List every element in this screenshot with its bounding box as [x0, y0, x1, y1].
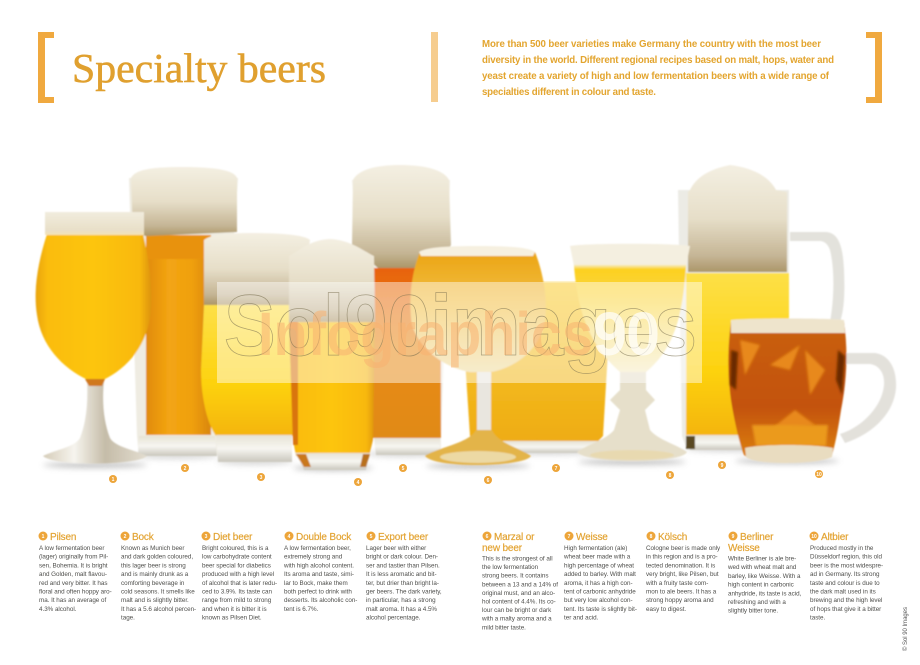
- column 2: Bock: [120, 532, 196, 622]
- watermark outline text: Sol90images: [224, 278, 697, 374]
- column 7: Weisse: aroma, it has a high con-: [564, 580, 633, 587]
- column 9: Berliner Weisse: Weisse: [728, 543, 760, 554]
- column 7: Weisse: wheat beer made with a: [563, 554, 631, 561]
- column 4: Double Bock: tent is 6.7%.: [284, 606, 319, 613]
- column 1: Pilsen: ma. It has an average of: [39, 597, 106, 604]
- column 10: Altbier: taste.: [810, 615, 826, 622]
- column 3: Diet beer: [202, 532, 277, 622]
- column 2: Bock: and is mainly drunk as a: [121, 571, 189, 578]
- glass number markers: [109, 461, 823, 486]
- column 9: Berliner Weisse: Berliner: [740, 532, 774, 543]
- column 8: Kolsch: tected denomination. It is: [646, 562, 715, 569]
- column 2: Bock: malt and is slightly bitter.: [121, 597, 189, 604]
- column 3: Diet beer: of alcohol that is later redu-: [202, 580, 277, 587]
- glass 7: weisse: [460, 282, 612, 455]
- column 7: Weisse: [563, 532, 637, 622]
- column 5: Export beer: bright or dark colour. Den-: [366, 554, 438, 561]
- glass number markers: 5: [402, 466, 405, 472]
- column 5: Export beer: Lager beer with either: [366, 545, 426, 552]
- column 1: Pilsen: [38, 532, 112, 613]
- column 3: Diet beer: Bright coloured, this is a: [202, 545, 269, 552]
- watermark panel: [217, 282, 702, 383]
- glass 8: kolsch: [570, 244, 690, 465]
- column 5: Export beer: in particular, has a strong: [366, 597, 436, 604]
- column 5: Export beer: Export beer: [378, 532, 429, 543]
- column 8: Kolsch: mon to ale beers. It has a: [646, 588, 717, 596]
- column 10: Altbier: ad in Germany. Its strong: [810, 571, 880, 578]
- column 7: Weisse: but very low alcohol con-: [564, 597, 633, 604]
- column 7: Weisse: High fermentation (ale): [564, 545, 627, 552]
- column 6: Marzal or new beer: hol content of 4.4%. Its co-: [482, 598, 556, 606]
- column 7: Weisse: tent of carbonic anhydride: [564, 588, 636, 596]
- glass number markers: 4: [357, 480, 360, 486]
- column 6: Marzal or new beer: 6: [486, 534, 489, 540]
- column 8: Kolsch: Kölsch: [658, 532, 687, 543]
- column 5: Export beer: ser and tastier than Pilsen.: [366, 562, 440, 569]
- column 10: Altbier: of hops that give it a bitter: [810, 606, 881, 613]
- column 9: Berliner Weisse: refreshing and with a: [728, 599, 786, 606]
- column 9: Berliner Weisse: high content in carbonic: [728, 582, 794, 589]
- column 5: Export beer: 5: [370, 534, 373, 540]
- divider: [431, 32, 438, 102]
- column 1: Pilsen: 4.3% alcohol.: [39, 606, 77, 613]
- column 5: Export beer: [366, 532, 442, 622]
- column 6: Marzal or new beer: [481, 532, 558, 631]
- column 6: Marzal or new beer: between a 13 and a 14% of: [482, 581, 558, 588]
- column 1: Pilsen: sen, Bohemia. It is bright: [39, 562, 108, 569]
- column 3: Diet beer: and when it is bitter it is: [202, 606, 267, 613]
- glass number markers: 8: [669, 473, 672, 479]
- glass number markers: 7: [555, 466, 558, 472]
- column 8: Kolsch: strong hoppy aroma and: [646, 597, 714, 604]
- title: Specialty beers: [72, 45, 326, 91]
- column 3: Diet beer: 3: [205, 534, 208, 540]
- column 2: Bock: Known as Munich beer: [121, 545, 184, 552]
- column 4: Double Bock: lar to Bock, make them: [284, 580, 348, 587]
- intro text: diversity in the world. Different regional recipes based on malt, hops, water and: [482, 55, 834, 66]
- glass number markers: 6: [487, 478, 490, 484]
- column 9: Berliner Weisse: wed with wheat malt and: [727, 564, 797, 571]
- column 3: Diet beer: range from mild to strong: [202, 597, 272, 604]
- intro text: specialties different in colour and taste.: [482, 87, 656, 98]
- glass number markers: 10: [816, 472, 822, 478]
- right bracket: [866, 32, 882, 103]
- glass number markers: 3: [260, 475, 263, 481]
- column 2: Bock: and dark golden coloured,: [121, 554, 193, 561]
- column 9: Berliner Weisse: barley, like Weisse. With a: [728, 573, 801, 580]
- column 10: Altbier: [810, 532, 883, 622]
- column 9: Berliner Weisse: 9: [732, 534, 735, 540]
- glass 2: bock: [129, 167, 238, 459]
- column 10: Altbier: Altbier: [821, 532, 849, 543]
- column 6: Marzal or new beer: new beer: [482, 543, 523, 554]
- column 5: Export beer: malt aroma. It has a 4.5%: [366, 606, 437, 613]
- column 3: Diet beer: beer special for diabetics: [202, 562, 271, 569]
- column 6: Marzal or new beer: mild bitter taste.: [482, 624, 526, 631]
- intro text: yeast create a variety of high and low fermentation beers with a wide range of: [482, 71, 830, 82]
- glass 1: pilsen: [36, 212, 151, 468]
- column 5: Export beer: It is less aromatic and bit-: [366, 571, 437, 578]
- column 1: Pilsen: 1: [42, 534, 45, 540]
- column 7: Weisse: high percentage of wheat: [564, 562, 634, 569]
- glass number markers: 9: [721, 463, 724, 469]
- column 10: Altbier: brewing and the high level: [810, 597, 882, 604]
- glass 5: export: [352, 165, 451, 457]
- column 6: Marzal or new beer: strong beers. It contains: [482, 573, 548, 580]
- copyright credit: © Sol 90 Images: [902, 607, 909, 651]
- glass 4: double bock: [289, 239, 375, 471]
- column 10: Altbier: the dark malt used in its: [810, 588, 876, 596]
- column 8: Kolsch: 8: [650, 534, 653, 540]
- column 7: Weisse: ter and acid.: [564, 615, 599, 622]
- column 1: Pilsen: A low fermentation beer: [39, 545, 104, 552]
- column 4: Double Bock: Double Bock: [296, 532, 352, 543]
- column 4: Double Bock: Its aroma and taste, simi-: [284, 571, 354, 578]
- column 5: Export beer: alcohol percentage.: [366, 615, 421, 622]
- column 10: Altbier: Düsseldorf region, this old: [810, 554, 883, 561]
- column 8: Kolsch: [645, 532, 721, 613]
- column 3: Diet beer: ced to 3.9%. Its taste can: [202, 588, 272, 596]
- column 8: Kolsch: Cologne beer is made only: [646, 545, 721, 552]
- column 1: Pilsen: and Golden, malt flavou-: [39, 571, 107, 578]
- column 2: Bock: tage.: [121, 615, 135, 622]
- column 1: Pilsen: floral and often hoppy aro-: [39, 588, 112, 596]
- column 7: Weisse: Weisse: [576, 532, 608, 543]
- column 8: Kolsch: easy to digest.: [646, 606, 686, 613]
- column 6: Marzal or new beer: Marzal or: [494, 532, 535, 543]
- column 2: Bock: 2: [124, 534, 127, 540]
- glass 10: altbier mug: [728, 318, 896, 464]
- column 7: Weisse: added to barley. With malt: [564, 571, 636, 578]
- column 2: Bock: cold seasons. It smells like: [121, 588, 195, 596]
- column 8: Kolsch: in this region and is a pro-: [646, 554, 718, 561]
- column 10: Altbier: beer is the most widespre-: [810, 562, 883, 569]
- column 1: Pilsen: (lager) originally from Pil-: [39, 554, 108, 561]
- column 4: Double Bock: [283, 532, 357, 613]
- column 6: Marzal or new beer: original must, and an alco-: [482, 590, 555, 597]
- column 6: Marzal or new beer: the low fermentation: [482, 564, 539, 571]
- column 3: Diet beer: Diet beer: [213, 532, 253, 543]
- column 9: Berliner Weisse: slightly bitter tone.: [728, 608, 778, 615]
- column 3: Diet beer: low carbohydrate content: [202, 554, 272, 561]
- column 10: Altbier: 10: [811, 534, 817, 540]
- watermark orange text: Infographics: [258, 300, 593, 368]
- column 7: Weisse: tent. Its taste is slightly bit-: [564, 606, 637, 613]
- column 1: Pilsen: red and very bitter. It has: [39, 580, 108, 587]
- column 4: Double Bock: A low fermentation beer,: [284, 545, 351, 552]
- column 4: Double Bock: with high alcohol content.: [283, 562, 354, 569]
- column 2: Bock: It has a 5.6 alcohol percen-: [121, 606, 196, 613]
- column 8: Kolsch: very bright, like Pilsen, but: [646, 571, 719, 578]
- column 10: Altbier: taste and colour is due to: [810, 580, 880, 587]
- glass 3: diet beer: [201, 233, 310, 465]
- column 9: Berliner Weisse: [727, 532, 802, 615]
- column 5: Export beer: ter, but drier than bright la-: [366, 580, 439, 587]
- column 4: Double Bock: 4: [288, 534, 291, 540]
- glass 9: stein: [678, 165, 844, 452]
- column 9: Berliner Weisse: White Berliner is ale bre-: [728, 556, 796, 562]
- glass number markers: 2: [184, 466, 187, 472]
- left bracket: [38, 32, 54, 103]
- watermark: [217, 278, 702, 383]
- intro text: [482, 39, 834, 98]
- column 5: Export beer: ger beers. The dark variety,: [366, 588, 442, 596]
- column 8: Kolsch: with a fruity taste com-: [645, 580, 708, 587]
- column 7: Weisse: 7: [568, 534, 571, 540]
- column 4: Double Bock: desserts. Its alcoholic con-: [284, 597, 357, 604]
- column 6: Marzal or new beer: with a malty aroma and a: [481, 616, 552, 623]
- column 9: Berliner Weisse: anhydride, its taste is acid,: [728, 590, 802, 597]
- column 1: Pilsen: Pilsen: [50, 532, 76, 543]
- column 4: Double Bock: extremely strong and: [284, 554, 343, 561]
- column 3: Diet beer: produced with a high level: [202, 571, 274, 578]
- column 6: Marzal or new beer: This is the strongest of all: [482, 556, 553, 562]
- column 3: Diet beer: known as Pilsen Diet.: [202, 615, 262, 622]
- watermark white number: 90: [593, 300, 660, 368]
- beer glasses illustration: [36, 165, 896, 471]
- column 6: Marzal or new beer: lour can be bright or dark: [482, 607, 552, 614]
- column 2: Bock: Bock: [132, 532, 155, 543]
- glass 6: marzal: [410, 246, 546, 469]
- column 2: Bock: this lager beer is strong: [121, 562, 186, 569]
- column 2: Bock: comforting beverage in: [121, 580, 185, 587]
- intro text: More than 500 beer varieties make Germany the country with the most beer: [482, 39, 821, 50]
- column 10: Altbier: Produced mostly in the: [810, 545, 874, 552]
- column 4: Double Bock: both perfect to drink with: [284, 588, 352, 596]
- glass number markers: 1: [112, 477, 115, 483]
